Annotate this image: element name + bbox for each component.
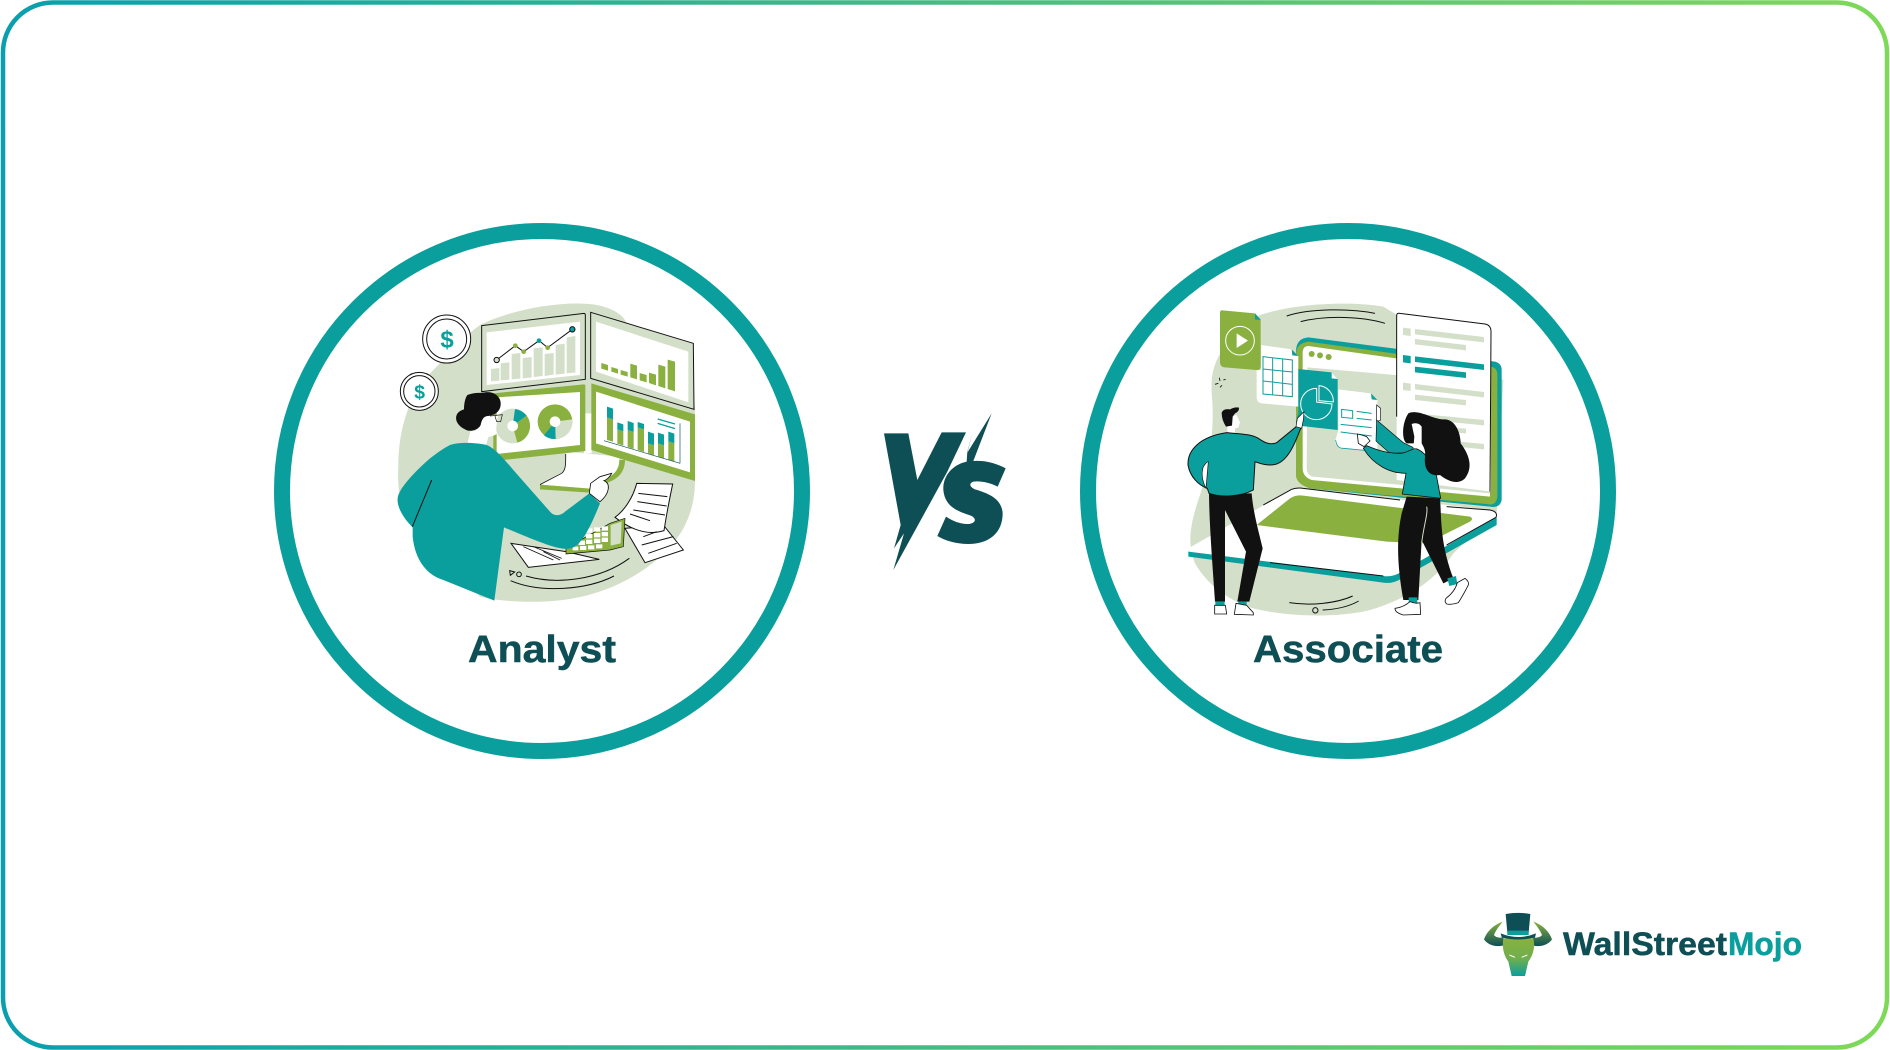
monitor: line and bar chart [482, 313, 585, 392]
letter S [937, 413, 1006, 544]
monitor stand [540, 413, 625, 493]
icon: small dollar coin: $ [414, 382, 425, 403]
vs mark [884, 413, 1006, 570]
background blob [1190, 304, 1503, 615]
swoosh lines [1215, 310, 1385, 613]
person: woman [1357, 405, 1470, 615]
circle ring: analyst [282, 231, 802, 751]
icon: table file [1257, 345, 1298, 407]
document panel [1397, 313, 1491, 492]
logo wordmark [1563, 926, 1802, 962]
icon: large dollar coin [423, 315, 471, 363]
logo wordmark: WallStreet [1563, 926, 1727, 962]
icon: large dollar coin: $ [440, 327, 454, 354]
icon: document file [1335, 389, 1377, 452]
person: analyst [398, 392, 612, 601]
monitor: donut charts [493, 384, 585, 460]
calculator [566, 518, 625, 554]
panel: analyst circle [282, 231, 802, 751]
monitor: green bar chart [591, 312, 694, 409]
torso and arm [398, 443, 600, 601]
logo wordmark: Mojo [1728, 926, 1802, 962]
background blob [398, 304, 695, 602]
hair bun and head [467, 430, 489, 445]
logo: WallStreetMojo [1484, 913, 1802, 976]
label: Analyst: Analyst [468, 629, 616, 671]
desk lines [510, 558, 629, 589]
monitor: stacked bar chart [591, 383, 695, 481]
icon: pie chart file [1296, 369, 1338, 430]
keyboard [511, 543, 599, 567]
person: man [1188, 407, 1304, 615]
icon: video file [1220, 310, 1261, 370]
label: Associate: Associate [1253, 629, 1443, 671]
icon: bull with top hat [1484, 913, 1552, 976]
illustration: two colleagues at laptop [1188, 304, 1503, 615]
panel: associate circle [1088, 231, 1608, 751]
illustration: analyst at monitors [398, 304, 695, 602]
paper sheets [615, 483, 683, 563]
laptop base [1188, 488, 1497, 583]
letter V [884, 432, 966, 570]
circle ring: associate [1088, 231, 1608, 751]
icon: small dollar coin [400, 372, 438, 410]
laptop screen [1296, 337, 1502, 507]
hand [589, 473, 612, 502]
